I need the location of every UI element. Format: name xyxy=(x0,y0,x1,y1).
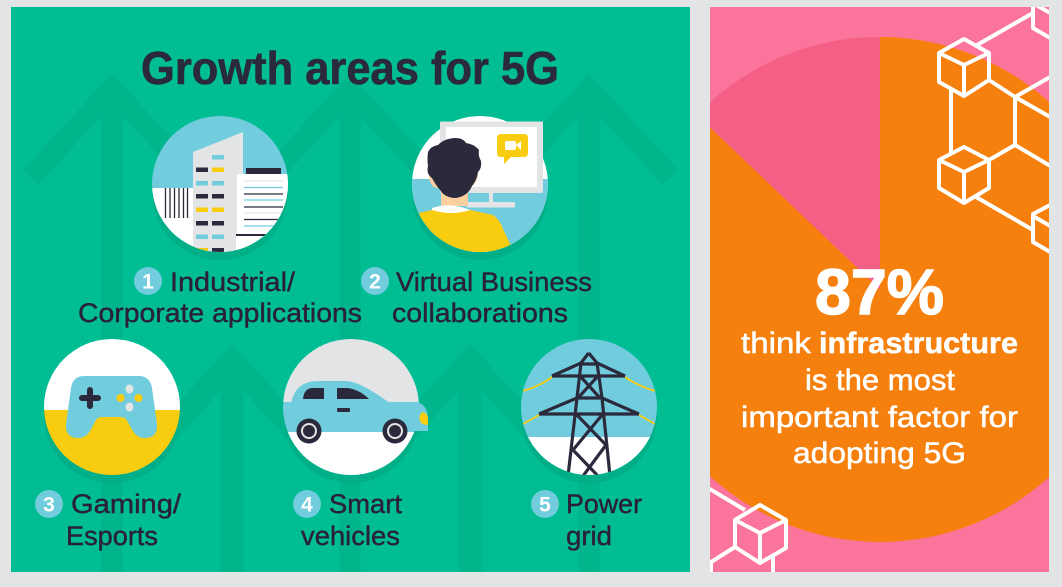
badge 5: 5 xyxy=(539,494,551,516)
background arrows xyxy=(30,89,670,572)
item 4: smart vehicles xyxy=(281,337,428,551)
badge 1 xyxy=(134,267,162,295)
item 2: virtual business xyxy=(361,116,592,328)
item 1: industrial xyxy=(78,114,362,328)
label 5: Power xyxy=(566,489,642,519)
badge 4: 4 xyxy=(301,494,313,516)
label 3 xyxy=(66,489,182,551)
cube: top right xyxy=(1033,5,1052,39)
connecting lines xyxy=(951,13,1052,230)
badge 4 xyxy=(293,490,321,518)
statistic: 87%: 87% xyxy=(815,256,944,328)
label 3: Esports xyxy=(66,521,158,551)
label 1: Corporate applications xyxy=(78,298,362,328)
label 2 xyxy=(392,267,592,328)
icon: car xyxy=(281,337,428,483)
badge 5 xyxy=(531,490,559,518)
title: Growth areas for 5G xyxy=(141,42,559,94)
label 3: Gaming/ xyxy=(71,489,182,519)
network lines and cubes xyxy=(708,5,1052,574)
panel: growth areas xyxy=(11,7,690,572)
icon: game controller xyxy=(42,337,182,483)
label 5: grid xyxy=(566,521,612,551)
statistic description: infrastructure xyxy=(819,327,1018,360)
item 3: gaming xyxy=(35,337,182,551)
item 5: power grid xyxy=(519,337,659,551)
icon: transmission tower xyxy=(519,337,659,483)
label 4: vehicles xyxy=(301,521,400,551)
label 1: Industrial/ xyxy=(170,267,296,297)
cube: lower right xyxy=(1033,204,1052,253)
statistic description: is the most xyxy=(805,364,955,397)
label 4: Smart xyxy=(329,489,402,519)
badge 3: 3 xyxy=(43,494,55,516)
badge 2 xyxy=(361,267,389,295)
icon: video chat bubble xyxy=(497,134,528,164)
panel: 87% statistic xyxy=(710,7,1049,572)
pie chart xyxy=(710,37,1049,542)
statistic description: important factor for xyxy=(741,401,1018,434)
icon: person at monitor xyxy=(410,116,550,260)
icon: office buildings xyxy=(150,114,292,260)
badge 2: 2 xyxy=(369,270,381,294)
statistic description: adopting 5G xyxy=(793,437,966,470)
statistic description xyxy=(741,327,1018,470)
cube: middle xyxy=(939,147,989,203)
label 2: Virtual Business xyxy=(396,267,592,297)
label 2: collaborations xyxy=(392,298,568,328)
statistic description: think xyxy=(741,327,811,360)
cube: upper xyxy=(939,39,989,96)
badge 1: 1 xyxy=(142,270,154,294)
cube: bottom left xyxy=(735,505,786,563)
label 4 xyxy=(301,489,402,551)
label 5 xyxy=(566,489,642,551)
label 1 xyxy=(78,267,362,328)
badge 3 xyxy=(35,490,63,518)
